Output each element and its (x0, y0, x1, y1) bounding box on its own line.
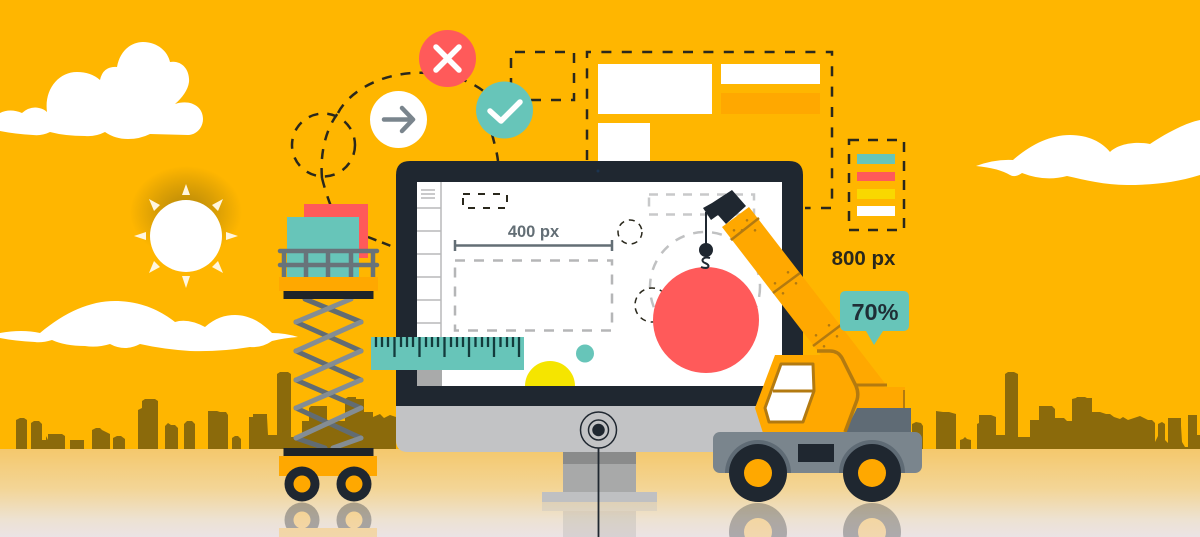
skyline: left (16, 372, 396, 449)
status icon: cross (419, 30, 476, 87)
logo placeholder (463, 194, 507, 208)
status icon: arrow (370, 91, 427, 148)
truck wheel arches (725, 440, 905, 473)
dashed circle small (618, 220, 642, 244)
status icon: check (476, 82, 533, 138)
webcam (596, 170, 600, 172)
ground (0, 449, 1200, 537)
boom joints (731, 218, 841, 348)
lift wheels (284, 466, 320, 502)
cloud: top left (0, 42, 203, 139)
layout blocks (598, 64, 820, 163)
crane head (703, 190, 746, 224)
lift base (284, 448, 374, 456)
dashed outline: large layout frame (587, 52, 832, 208)
cab window divider (773, 390, 814, 392)
dashed outline: small frame (511, 52, 574, 100)
width dimension line (455, 240, 612, 251)
monitor screen (417, 182, 782, 386)
red wrecking ball (653, 267, 759, 373)
yellow semicircle (525, 361, 575, 386)
dashed circle gray (650, 232, 760, 342)
cab window (765, 364, 814, 422)
scissor lift (279, 204, 378, 537)
cloud: middle left (0, 301, 298, 351)
crane rear body (855, 387, 905, 408)
gray dashed placeholder (455, 260, 612, 330)
lift scissor arms (296, 299, 361, 448)
monitor chin (396, 400, 803, 452)
crane reflection (729, 503, 901, 537)
label: 400 px: 400 px (508, 223, 560, 241)
teal dot (576, 344, 594, 362)
monitor frame (396, 161, 803, 406)
monitor logo (580, 412, 616, 448)
cloud: right (976, 120, 1200, 185)
lift platform (279, 277, 378, 291)
crane counterweight (845, 408, 911, 432)
truck panel (798, 444, 834, 462)
lift cargo red (304, 204, 368, 258)
lift cargo teal (287, 217, 359, 277)
skyline: right (912, 372, 1200, 449)
dashed motion path (292, 73, 500, 246)
crane cable (705, 212, 707, 250)
crane hook ball (699, 243, 713, 257)
colour swatches panel (849, 140, 904, 230)
truck wheels (729, 444, 787, 502)
label: 800 px: 800 px (832, 247, 896, 270)
monitor (396, 161, 803, 537)
cab outline arc (817, 351, 858, 432)
ruler (371, 337, 524, 370)
crane hook (701, 258, 710, 268)
crane truck (699, 190, 922, 537)
dashed circle left (635, 288, 669, 322)
screen sidebar (417, 182, 442, 386)
crane boom (722, 207, 887, 395)
monitor cable (598, 448, 600, 537)
crane cab (755, 355, 860, 433)
speech bubble: 70%: 70% (851, 299, 899, 325)
monitor stand (542, 452, 657, 537)
gray dashed top placeholder (649, 194, 754, 214)
speech bubble: 70% (840, 291, 909, 345)
lift rail (280, 251, 377, 277)
truck chassis (713, 432, 922, 473)
sun (130, 166, 242, 288)
lift reflection (279, 502, 377, 537)
